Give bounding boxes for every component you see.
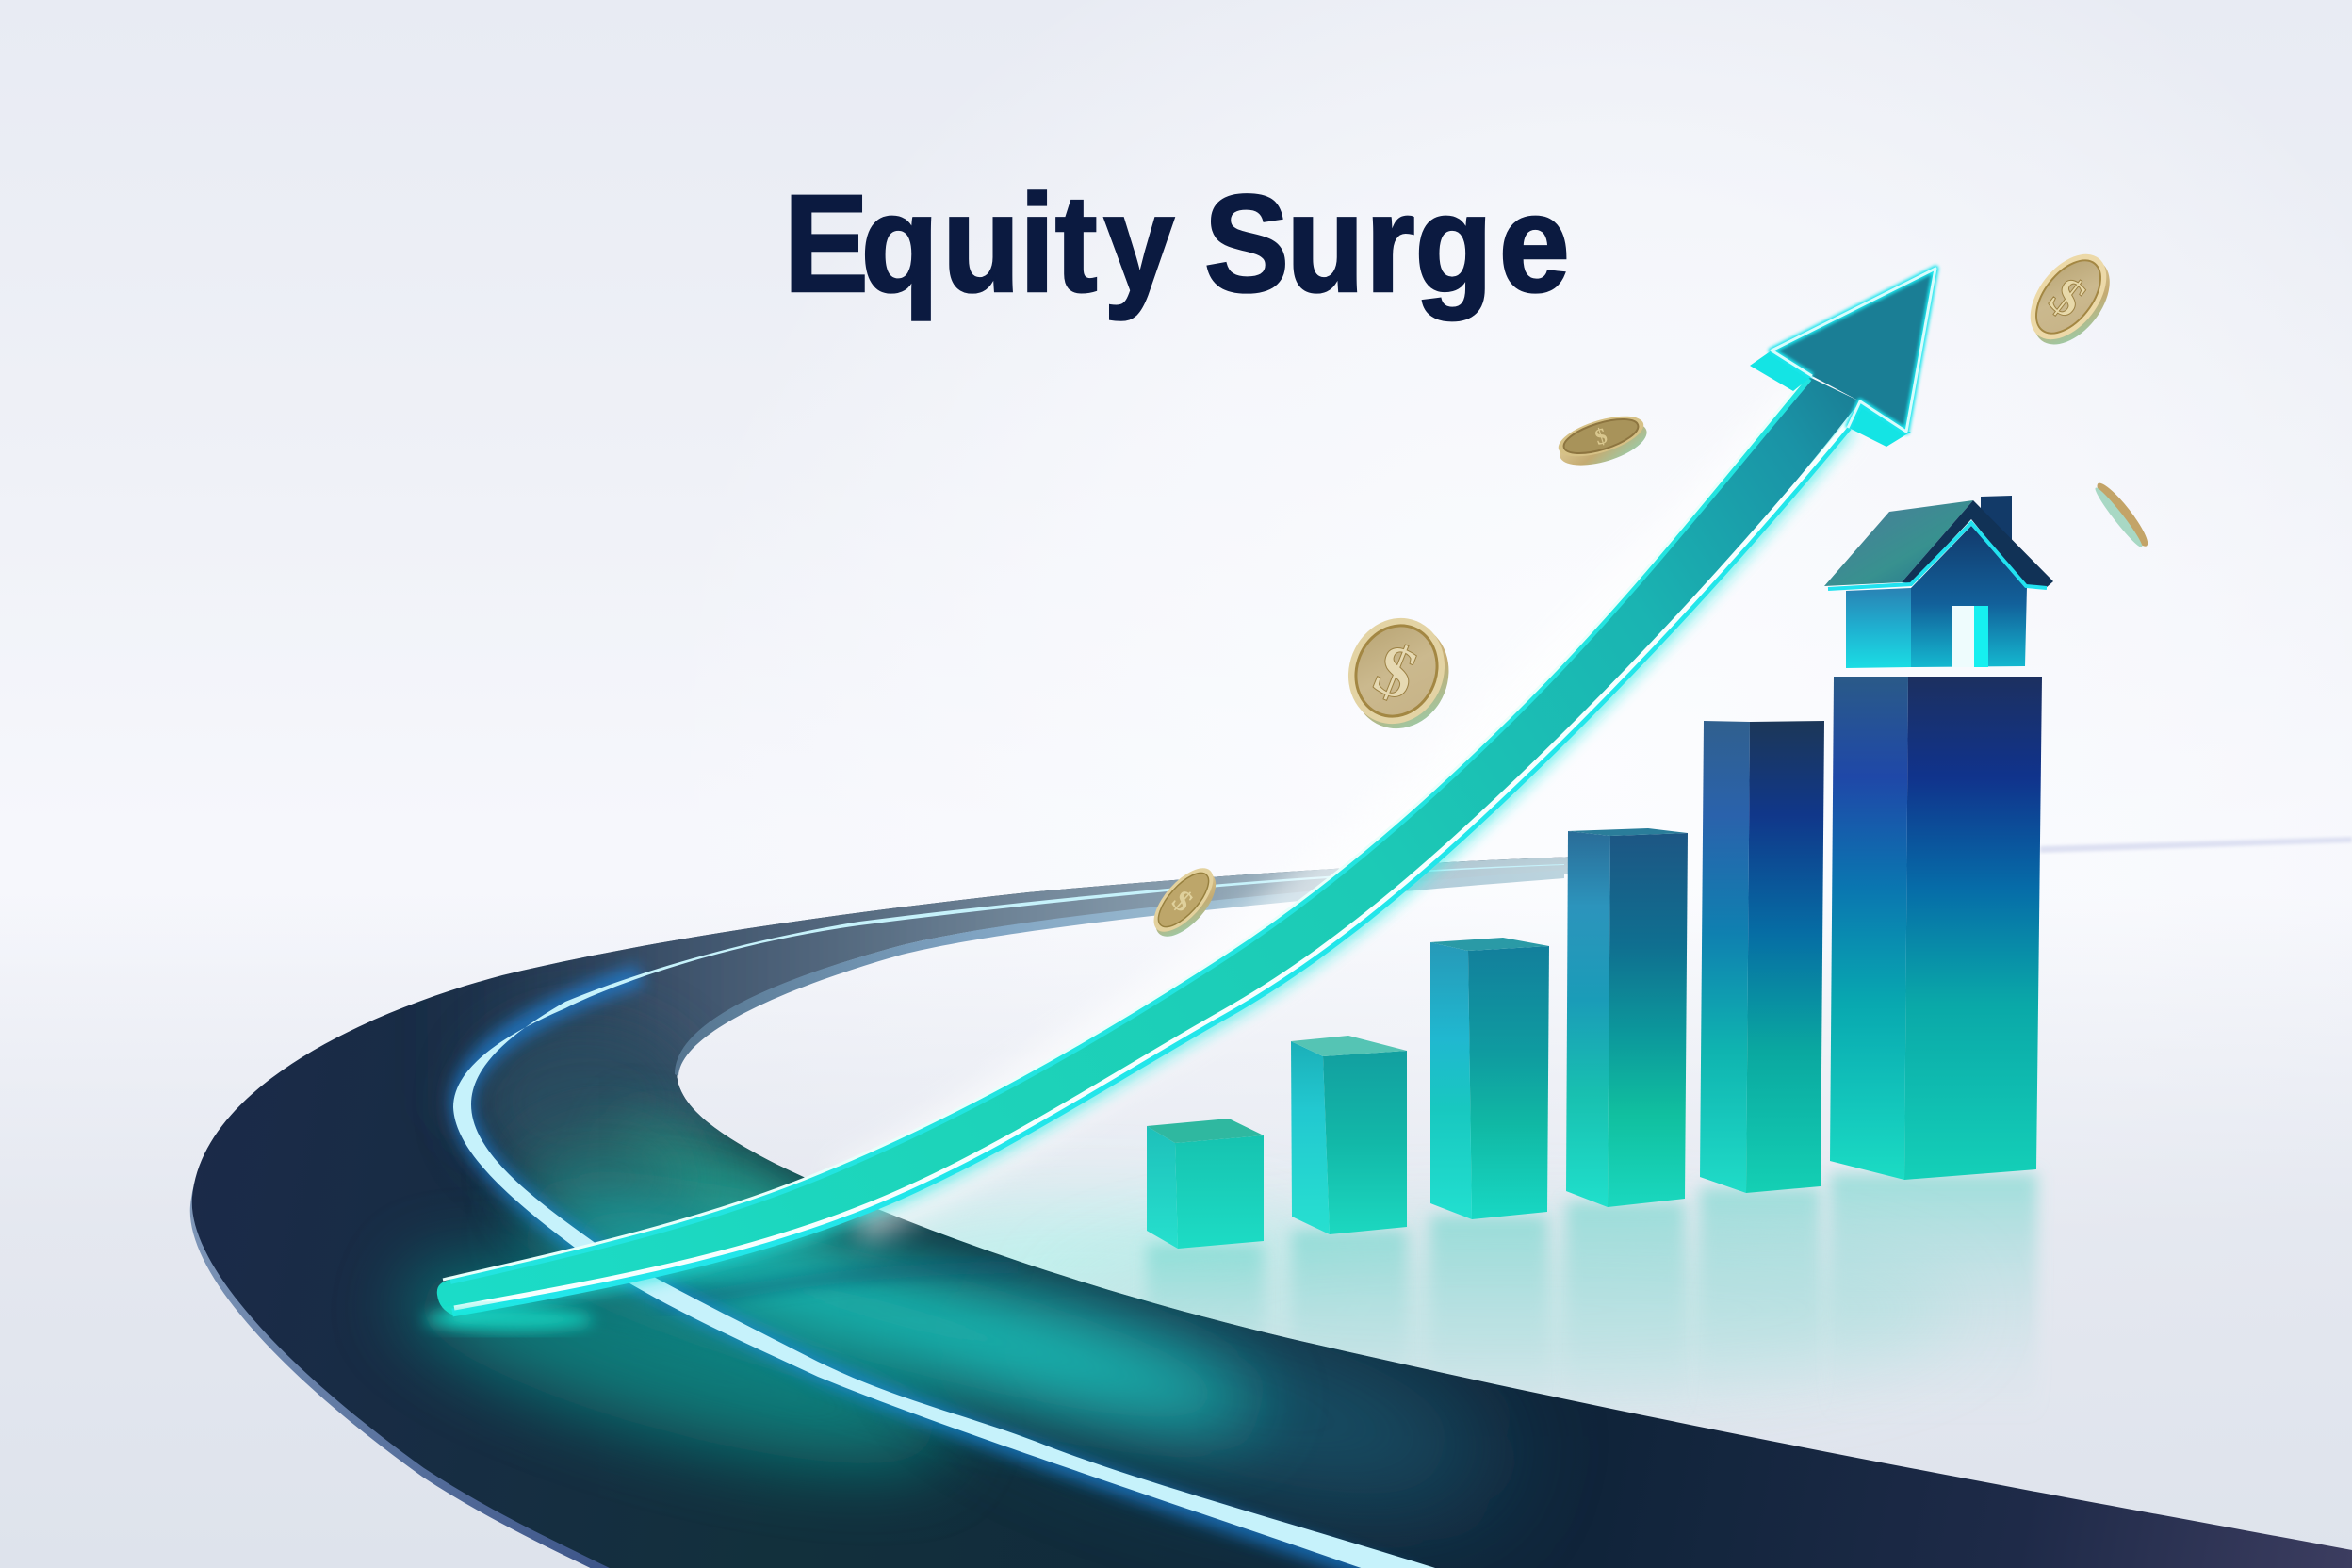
coin: on road: $ xyxy=(1166,883,1200,918)
arrow inner cyan edge xyxy=(450,379,1809,1282)
bar 6 xyxy=(1830,677,2042,1180)
bar 4 xyxy=(1566,828,1688,1207)
door xyxy=(1952,606,1988,667)
road surface xyxy=(192,856,2352,1568)
arrowhead side faces xyxy=(1750,351,1911,447)
arrow upper edge highlight xyxy=(443,375,1807,1280)
growth arrow xyxy=(424,269,1936,1331)
house icon xyxy=(1824,496,2053,668)
bar chart xyxy=(1147,677,2042,1249)
glowing lane line xyxy=(453,864,1564,1568)
coin: thin edge-on xyxy=(2091,479,2153,551)
coin: large xyxy=(1331,603,1465,743)
bar 1 xyxy=(1147,1119,1264,1249)
coin: upper right xyxy=(2014,240,2126,358)
coin: upper middle xyxy=(1553,408,1652,474)
bar 5 xyxy=(1700,721,1824,1193)
coin: on road xyxy=(1142,858,1228,946)
title: Equity Surge xyxy=(784,166,1570,320)
left wall xyxy=(1846,588,1911,668)
arrow lower edge highlight xyxy=(452,427,1848,1313)
roof xyxy=(1824,500,1973,586)
bar 3 xyxy=(1430,938,1549,1219)
chimney xyxy=(1981,496,2012,547)
right wall xyxy=(1911,526,2027,667)
road inner edge xyxy=(675,870,1564,1076)
road far section and teal glow xyxy=(380,858,1568,1545)
floor reflections xyxy=(839,837,2352,1418)
arrowhead outline xyxy=(1772,269,1936,432)
coin: large: $ xyxy=(1364,627,1429,716)
bar 2 xyxy=(1291,1036,1407,1234)
arrowhead xyxy=(1772,269,1936,432)
coin: upper right: $ xyxy=(2038,265,2098,330)
road outer side wall xyxy=(190,984,677,1568)
arrow cyan glow xyxy=(450,428,1848,1314)
arrow start glow xyxy=(424,1308,594,1331)
arrow shaft xyxy=(437,377,1860,1315)
arrow white halo xyxy=(848,405,1828,1206)
coin: upper middle: $ xyxy=(1592,424,1610,450)
horizon line xyxy=(2040,837,2352,853)
curved road xyxy=(190,810,2352,1568)
